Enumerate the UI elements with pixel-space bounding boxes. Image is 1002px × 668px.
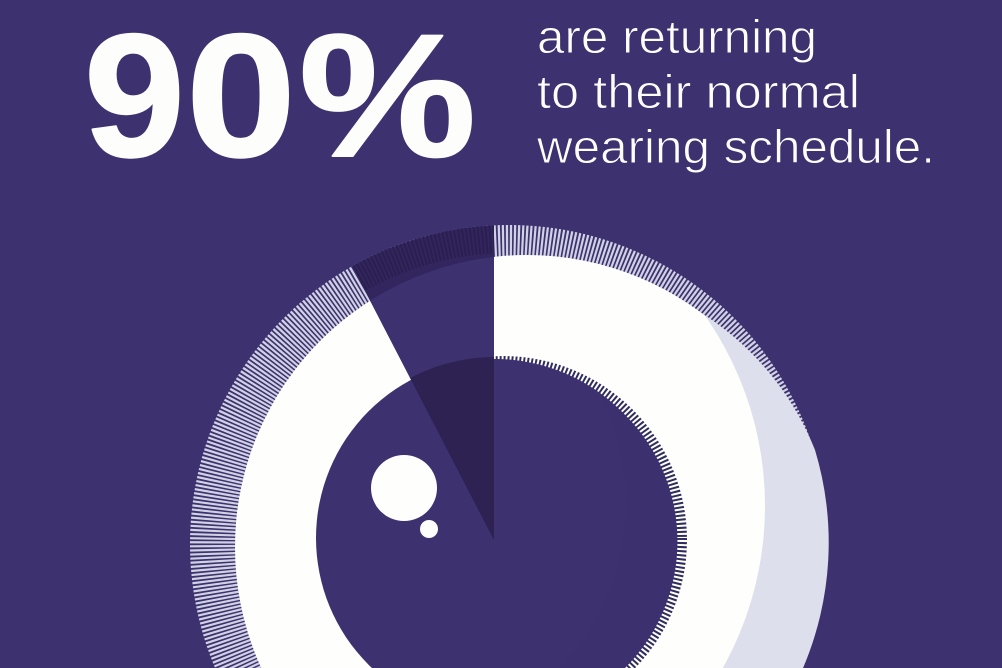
white ring segment <box>235 255 819 668</box>
thought bubble: small <box>420 520 438 538</box>
statement text: are returning <box>537 10 817 63</box>
wedge: dark inner sector <box>410 357 494 540</box>
hatched outer ring <box>214 249 804 668</box>
thought bubble: large <box>371 455 437 521</box>
statement text <box>536 10 935 173</box>
wedge: dark hatched ring band <box>352 225 494 380</box>
statement text: to their normal <box>537 65 860 118</box>
pale grey crescent <box>700 312 829 668</box>
missing 10% wedge <box>352 225 494 540</box>
big statistic: 90% <box>84 0 476 194</box>
faint inner crescent shade <box>618 408 678 668</box>
inner hatched edge <box>496 356 687 668</box>
wedge: middle cut-out <box>370 257 494 380</box>
wedge: band hatching <box>352 225 494 290</box>
donut chart <box>190 225 829 668</box>
statement text: wearing schedule. <box>536 120 935 173</box>
inner disc <box>316 359 628 668</box>
big statistic: 90%: % <box>299 0 476 194</box>
big statistic: 90%: 0 <box>186 0 296 194</box>
big statistic: 90%: 9 <box>84 0 185 194</box>
